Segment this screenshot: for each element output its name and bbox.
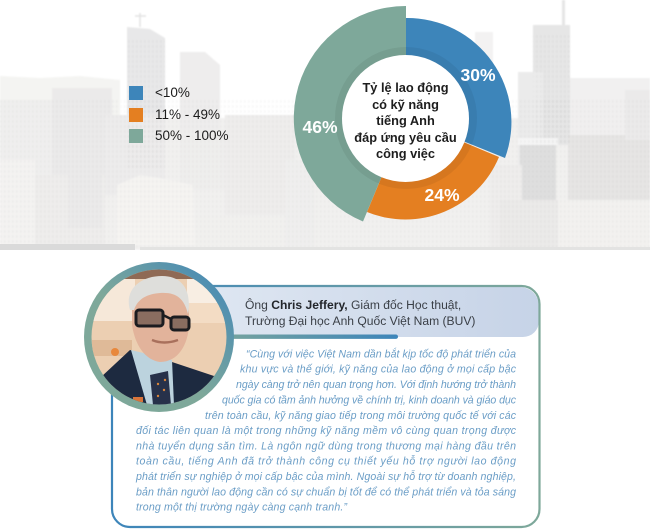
donut centre title: có kỹ năng	[372, 96, 439, 112]
centre hole	[342, 55, 469, 182]
legend label: under 10%: <10%	[155, 85, 190, 100]
value label: 24%: 24%	[424, 185, 460, 205]
segment: orange 24%	[367, 118, 499, 220]
donut centre title: đáp ứng yêu cầu	[354, 130, 457, 144]
quote text: khu vực và thế giới, kỹ năng của lao động ở mọi cấp bậc	[240, 364, 517, 376]
background: hazy city skyline	[0, 0, 650, 250]
quote text: toàn cầu, tiếng Anh đã trở thành công cụ thiết yếu hỗ trợ người lao động	[136, 454, 516, 468]
quote text	[135, 348, 517, 514]
speaker name and title	[245, 298, 475, 328]
donut centre title: công việc	[376, 146, 435, 161]
quote text: trong một thị trường ngày càng cạnh tranh.”	[136, 502, 347, 514]
legend swatch: 11 to 49%	[129, 108, 143, 122]
quote text: “Cùng với việc Việt Nam dần bắt kịp tốc độ phát triển của	[246, 348, 516, 360]
donut centre title	[354, 80, 457, 161]
panel border	[112, 286, 540, 527]
legend swatch: under 10%	[129, 86, 143, 100]
speaker name and title: Ông Chris Jeffery, Giám đốc Học thuật,	[245, 298, 461, 312]
quote text: đối tác liên quan là một trong những kỹ năng mềm vô cùng quan trọng được	[136, 425, 517, 437]
quote text: phát triển sự nghiệp ở mọi cấp bậc của mình. Ngoài sự hỗ trợ từ doanh nghiệp,	[135, 470, 516, 483]
legend	[129, 85, 229, 143]
portrait of Chris Jeffery	[84, 262, 234, 412]
legend swatch: 50 to 100%	[129, 129, 143, 143]
legend label: 11 to 49%: 11% - 49%	[155, 107, 220, 122]
value label: 46%: 46%	[302, 117, 338, 137]
segment: blue 30%	[406, 18, 511, 158]
quote text: ngày càng trở nên quan trọng hơn. Với định hướng trở thành	[236, 379, 516, 391]
quote text: bản thân người lao động cần có sự chuẩn bị tốt để có thể phát triển và tỏa sáng	[136, 486, 516, 498]
segment: green 46%	[294, 6, 406, 222]
quote text: nhà tuyển dụng săn tìm. Là ngôn ngữ dùng trong thương mại hàng đầu trên	[136, 440, 516, 452]
quote panel	[84, 262, 541, 528]
speaker name and title: Trường Đại học Anh Quốc Việt Nam (BUV)	[245, 314, 475, 328]
donut centre title: Tỷ lệ lao động	[362, 80, 449, 95]
header underline bar	[200, 334, 398, 339]
quote text: quốc gia có tầm ảnh hưởng về chính trị, kinh doanh và giáo dục	[222, 394, 517, 406]
header band	[200, 287, 539, 337]
legend label: 50 to 100%: 50% - 100%	[155, 128, 229, 143]
donut chart	[294, 6, 512, 222]
quote text: trên toàn cầu, kỹ năng giao tiếp trong môi trường quốc tế với các	[205, 410, 517, 422]
donut centre title: tiếng Anh	[376, 113, 435, 128]
value label: 30%: 30%	[460, 65, 496, 85]
inner shade ring	[335, 47, 477, 189]
